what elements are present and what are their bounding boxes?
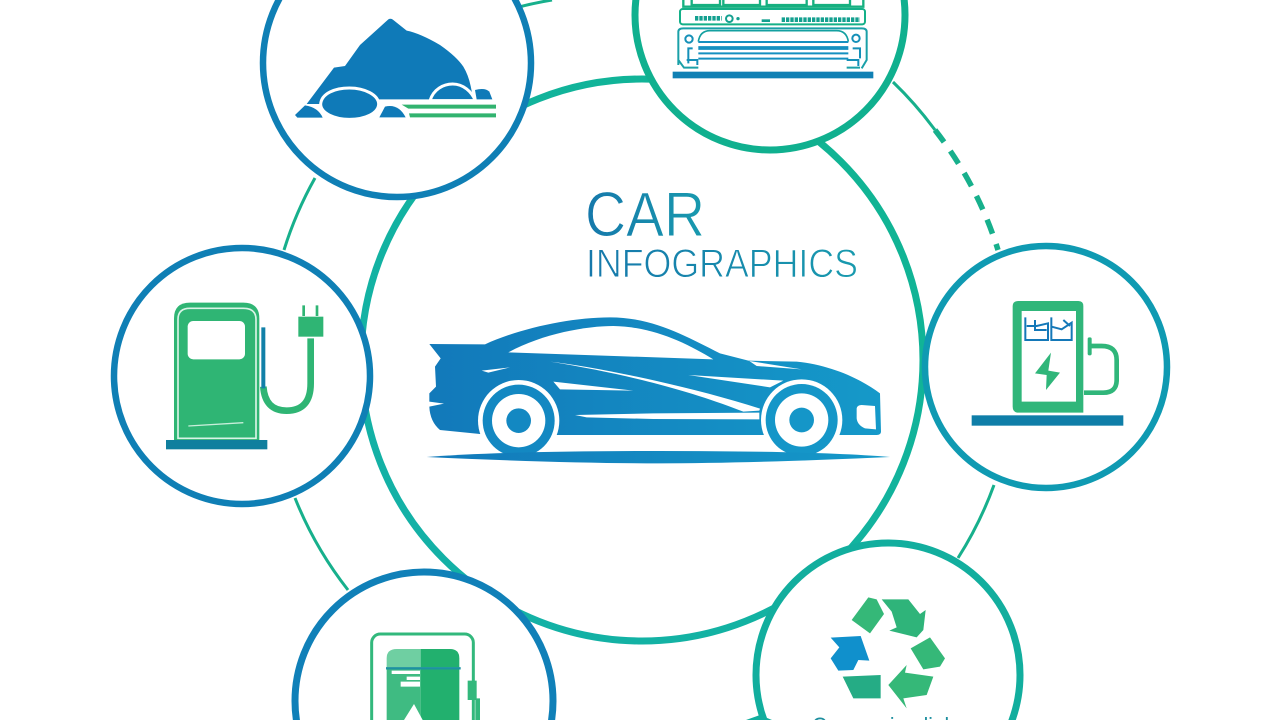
- circle: charging station: [925, 246, 1167, 488]
- central ring: [361, 79, 923, 641]
- title: [585, 180, 858, 286]
- icon: mountain and rocks: [295, 19, 496, 119]
- circle: recycling: [756, 543, 1020, 720]
- circle: raw materials: [263, 0, 531, 197]
- icon: charger with bolt: [972, 301, 1123, 426]
- circle: fuel container: [295, 572, 553, 720]
- subtitle: INFOGRAPHICS: [586, 242, 858, 286]
- car silhouette: [427, 317, 890, 463]
- connector ring: thin outer links between the circles: [284, 0, 998, 590]
- title: CAR: [585, 180, 705, 250]
- icon: green canister: [372, 634, 480, 720]
- ground shadow: [427, 451, 890, 463]
- circle: fuel pump with plug: [114, 248, 370, 504]
- car windows: [508, 326, 713, 359]
- icon: stacked engine block: [673, 0, 873, 78]
- arrow: bottom-right stub: [746, 715, 772, 720]
- icon: electric fuel pump: [166, 303, 323, 449]
- front wheel: [766, 384, 838, 456]
- rear wheel: [483, 385, 555, 457]
- icon: recycling arrows: [831, 597, 945, 708]
- circle: engine / battery unit: [635, 0, 905, 150]
